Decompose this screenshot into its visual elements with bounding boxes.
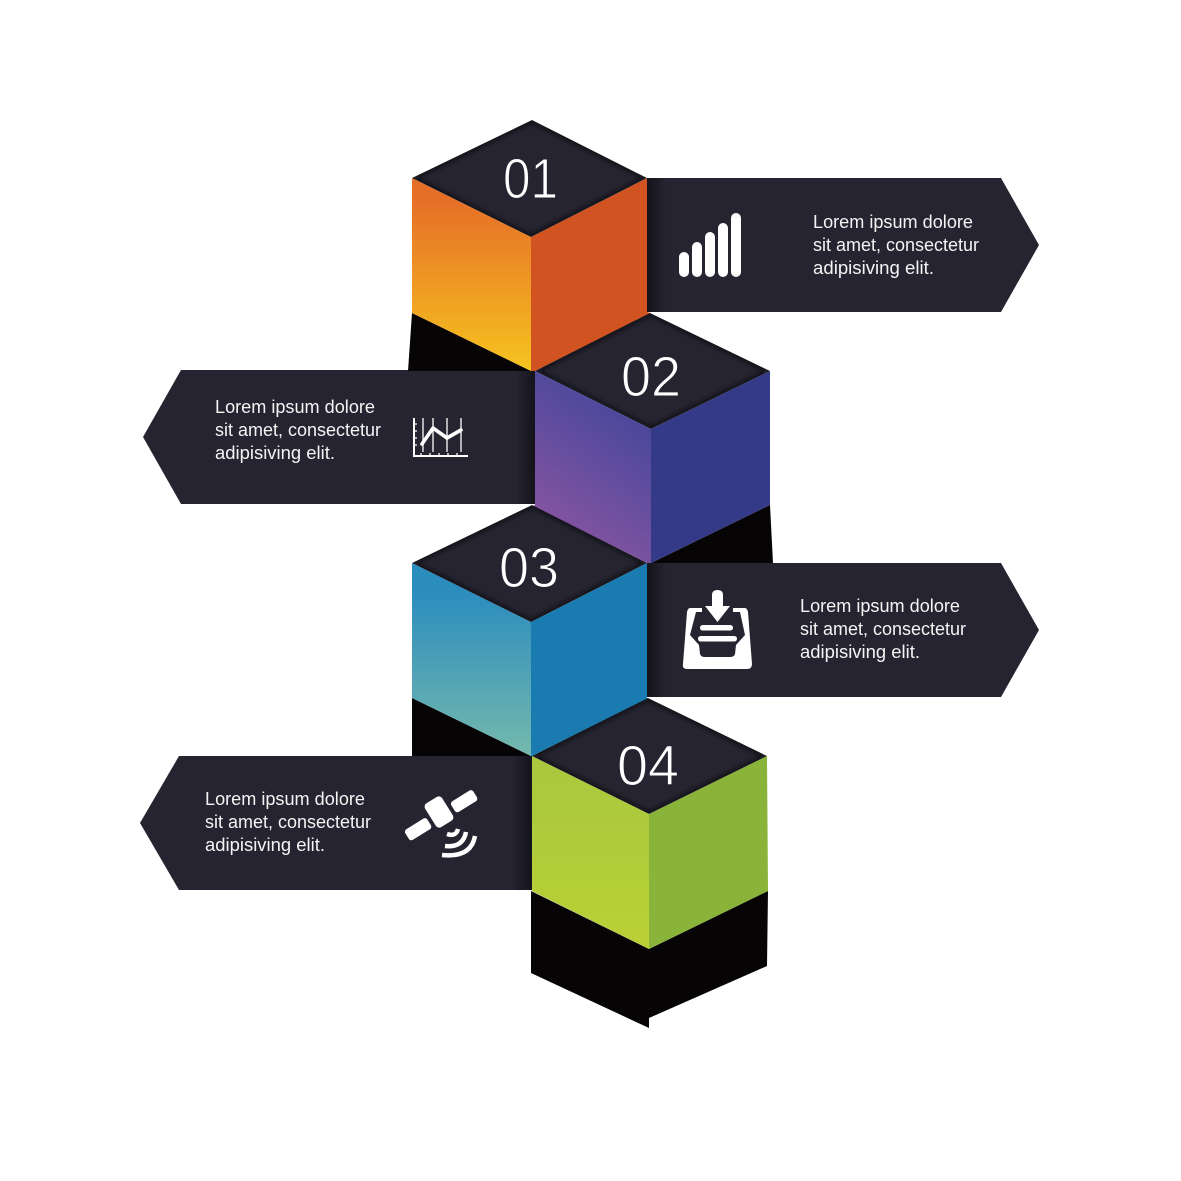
text block 3: adipisiving elit. (800, 642, 920, 662)
cube 02 top face (535, 313, 770, 429)
cube 03 shadow (412, 698, 531, 756)
text block 1 (813, 212, 979, 278)
icon: signal bars (679, 213, 741, 277)
icon: inbox download tray (683, 590, 752, 669)
icon: line chart (414, 418, 468, 456)
text block 3: Lorem ipsum dolore (800, 596, 960, 616)
text block 4: adipisiving elit. (205, 835, 325, 855)
text block 2: adipisiving elit. (215, 443, 335, 463)
icon: satellite (404, 789, 478, 855)
number 02: 02 (621, 345, 681, 409)
text block 1: Lorem ipsum dolore (813, 212, 973, 232)
banner 3 (647, 563, 1039, 697)
text block 4: Lorem ipsum dolore (205, 789, 365, 809)
cube 01 (408, 120, 651, 371)
cube 01 right face (531, 178, 651, 371)
text block 2 (215, 397, 381, 463)
cube 04 shadow (531, 891, 768, 1028)
number 04: 04 (617, 734, 679, 798)
text block 4 (205, 789, 371, 855)
cube 03 right face (531, 563, 649, 756)
number 01: 01 (503, 147, 558, 211)
cube 02 (533, 313, 773, 563)
cube 04 (531, 698, 768, 1028)
cube 02 shadow (651, 505, 773, 563)
cube 01 shadow (408, 313, 531, 371)
text block 2: sit amet, consectetur (215, 420, 381, 440)
number 03: 03 (499, 536, 559, 600)
cube 03 (412, 505, 649, 756)
cube 03 left face (412, 563, 531, 756)
text block 3 (800, 596, 966, 662)
banner 4 (140, 756, 532, 890)
cube 02 right face (651, 371, 770, 563)
banner 1 (647, 178, 1039, 312)
text block 2: Lorem ipsum dolore (215, 397, 375, 417)
text block 3: sit amet, consectetur (800, 619, 966, 639)
text block 4: sit amet, consectetur (205, 812, 371, 832)
cube 01 top face (412, 120, 647, 237)
cube 04 right face (649, 756, 768, 949)
cube 03 top face (412, 505, 647, 622)
cube 01 left face (412, 178, 531, 371)
banner 2 (143, 370, 535, 504)
cube 04 top face (532, 698, 767, 814)
cube 04 left face (532, 756, 649, 949)
text block 1: adipisiving elit. (813, 258, 934, 278)
cube 02 left face (533, 371, 651, 563)
text block 1: sit amet, consectetur (813, 235, 979, 255)
